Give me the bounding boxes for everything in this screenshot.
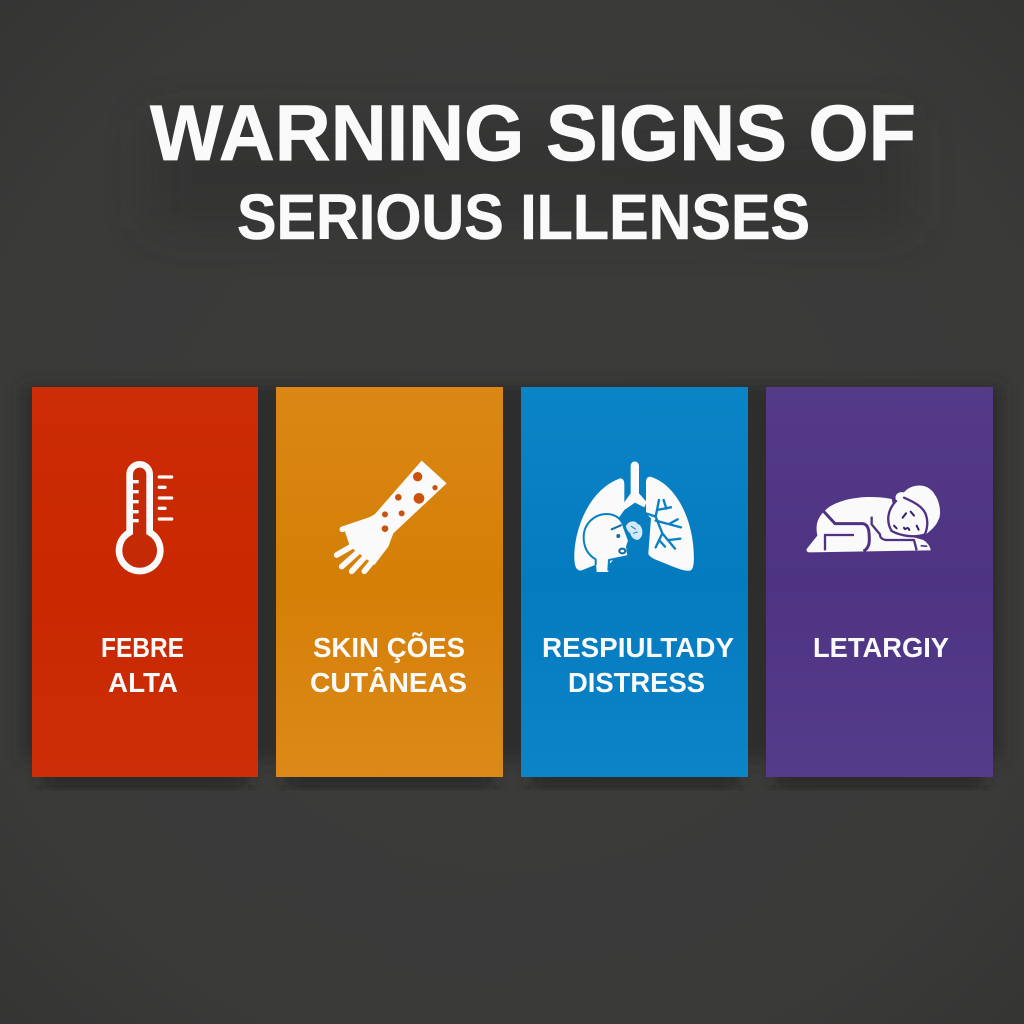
label: respiratory <box>542 632 734 698</box>
icon: sleeping person <box>806 486 940 552</box>
title <box>150 88 916 253</box>
label: febre alta: ALTA <box>108 667 178 698</box>
label: skin: CUTÂNEAS <box>310 667 467 698</box>
label: febre alta: FEBRE <box>101 632 184 663</box>
panel: respiratory <box>521 387 748 777</box>
title: WARNING SIGNS OF <box>150 88 916 177</box>
panel: febre alta <box>32 387 258 777</box>
panel: skin <box>276 387 503 777</box>
title: SERIOUS ILLENSES <box>237 181 810 253</box>
icon: arm with rash <box>337 461 447 571</box>
label: respiratory: RESPIULTADY <box>542 632 734 663</box>
label: lethargy: LETARGIY <box>813 632 949 663</box>
label: skin: SKIN ÇÕES <box>313 632 465 663</box>
label: respiratory: DISTRESS <box>568 667 705 698</box>
icon: thermometer <box>119 464 172 571</box>
panel: lethargy <box>766 387 993 777</box>
label: skin <box>310 632 467 698</box>
icon: lungs and head <box>574 461 694 572</box>
label: febre alta <box>101 632 184 698</box>
